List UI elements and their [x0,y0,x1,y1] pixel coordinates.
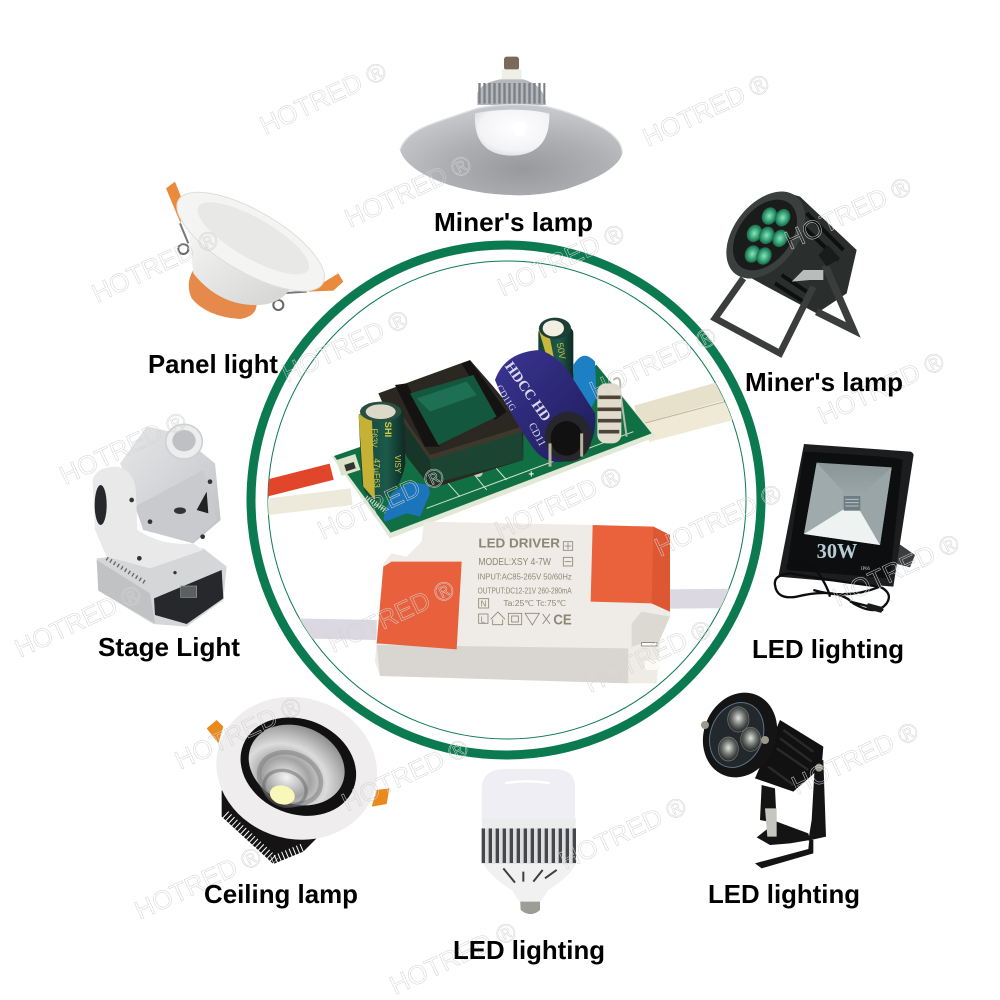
label: ceiling lamp: Ceiling lamp [204,879,358,909]
ceiling lamp [200,679,393,864]
miner's lamp, top [400,57,622,195]
watermarks: HOTRED ® [490,461,626,545]
watermarks: HOTRED ® [170,691,306,775]
T bulb [482,769,576,914]
enclosed LED driver [293,522,747,683]
driver label: MODEL:XSY 4-7W [478,557,551,568]
central circle frame [251,245,761,755]
left electrolytic capacitor: SHI [383,422,393,437]
flood light reflector window [804,463,892,545]
large purple capacitor [493,350,595,467]
label icons [479,542,573,625]
stage moving head light [93,424,227,627]
yoke arm [93,467,203,568]
watermarks: HOTRED ® [580,614,716,698]
label: flood LED lighting: LED lighting [752,634,904,664]
driver label: LED DRIVER [478,536,560,550]
watermarks: HOTRED ® [337,733,473,817]
watermarks: HOTRED ® [277,304,413,388]
watermarks: HOTRED ® [813,346,949,430]
spot bracket [755,760,826,868]
green LEDs [742,205,793,267]
watermarks: HOTRED ® [493,218,629,302]
label: right miner's lamp: Miner's lamp [745,367,903,397]
left electrolytic capacitor: VISY [393,455,402,474]
striped resistor [597,378,627,443]
driver label: Ta:25℃ Tc:75℃ [503,599,566,608]
large purple capacitor: CD11 [526,421,547,449]
label: top miner's lamp: Miner's lamp [434,207,593,237]
driver label: OUTPUT:DC12-21V 260-280mA [478,585,572,595]
label: bulb LED lighting: LED lighting [453,935,605,965]
power cable [775,562,889,610]
small capacitor [538,318,573,387]
watermarks: HOTRED ® [340,149,476,233]
garden spot light [690,681,826,868]
green PCB [332,365,657,538]
central product photo group [263,318,747,683]
driver label: N [481,600,487,609]
flood light 30W [775,444,915,613]
watermarks: HOTRED ® [130,841,266,925]
watermarks: HOTRED ® [385,916,521,1000]
panel light [163,173,343,319]
watermarks: HOTRED ® [787,716,923,800]
labels [98,207,904,965]
watermarks: HOTRED ® [828,528,964,612]
bare LED driver circuit board [263,318,743,538]
green PCB: + [528,469,534,480]
large purple capacitor: CD11G [493,384,517,413]
fixture base [97,548,227,627]
driver label: L [481,616,486,625]
driver label: CE [553,612,572,628]
blue film capacitor [573,356,597,413]
watermarks: HOTRED ® [10,579,146,663]
driver label: INPUT:AC85-265V 50/60Hz [478,571,572,581]
watermarks: HOTRED ® [555,791,691,875]
watermarks: HOTRED ® [638,68,774,152]
watermarks: HOTRED ® [780,171,916,255]
driver cables [293,598,747,630]
watermarks: HOTRED ® [650,478,786,562]
head body [120,427,221,543]
flood light 30W: IP66 [861,567,870,572]
input wires [263,472,352,507]
orange end caps [376,562,462,650]
output wires [637,385,743,433]
watermarks: HOTRED ® [87,224,223,308]
label: stage light: Stage Light [98,632,240,662]
watermarks: HOTRED ® [313,461,449,545]
watermarks: HOTRED ® [323,574,459,658]
blue ceramic capacitor [383,482,430,522]
driver label [478,536,572,628]
head lens [166,424,202,459]
spot LEDs [718,707,761,761]
label: panel light: Panel light [148,349,278,379]
transformer [378,360,523,488]
watermarks: HOTRED ® [585,321,721,405]
large purple capacitor: HDCC HD [501,359,554,425]
left electrolytic capacitor: 47µF63 [372,458,382,488]
driver housing [375,522,670,683]
watermarks: HOTRED ® [255,56,391,140]
left electrolytic capacitor: F63V [370,428,379,448]
left electrolytic capacitor [359,402,405,500]
par can light [710,177,857,353]
label: spot LED lighting: LED lighting [708,879,860,909]
watermarks: HOTRED ® [55,406,191,490]
flood light 30W: 30W [817,539,857,563]
small capacitor: 50V [555,342,568,361]
